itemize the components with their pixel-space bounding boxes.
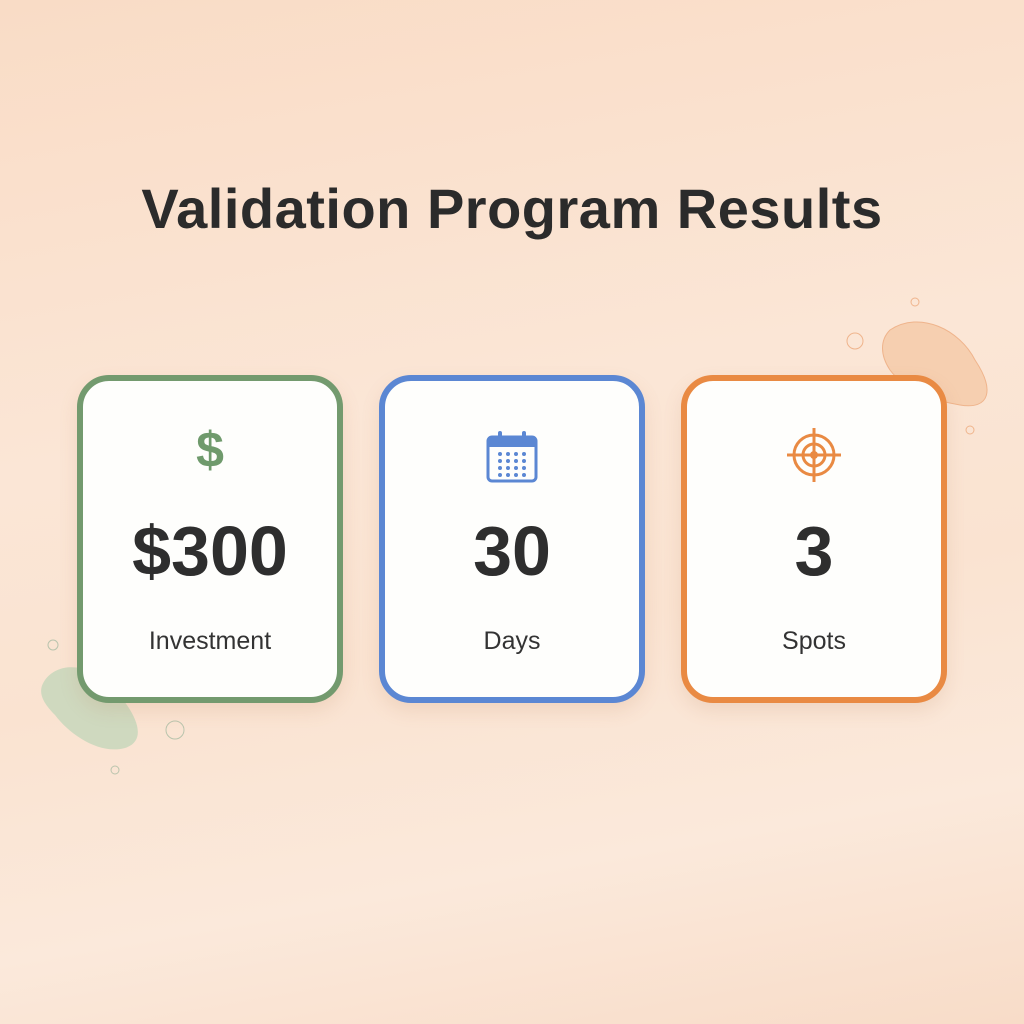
icon: target — [787, 428, 841, 482]
card: investment — [77, 375, 343, 703]
label: Spots — [782, 627, 846, 655]
card: days — [379, 375, 645, 703]
title: Validation Program Results — [141, 177, 883, 240]
icon: dollar: $ — [196, 422, 224, 478]
label: Days — [484, 627, 540, 655]
card: spots — [681, 375, 947, 703]
value: 3 — [795, 512, 833, 590]
value: 30 — [473, 512, 551, 590]
value: $300 — [132, 512, 288, 590]
icon: calendar — [486, 431, 538, 482]
label: Investment — [149, 627, 271, 655]
